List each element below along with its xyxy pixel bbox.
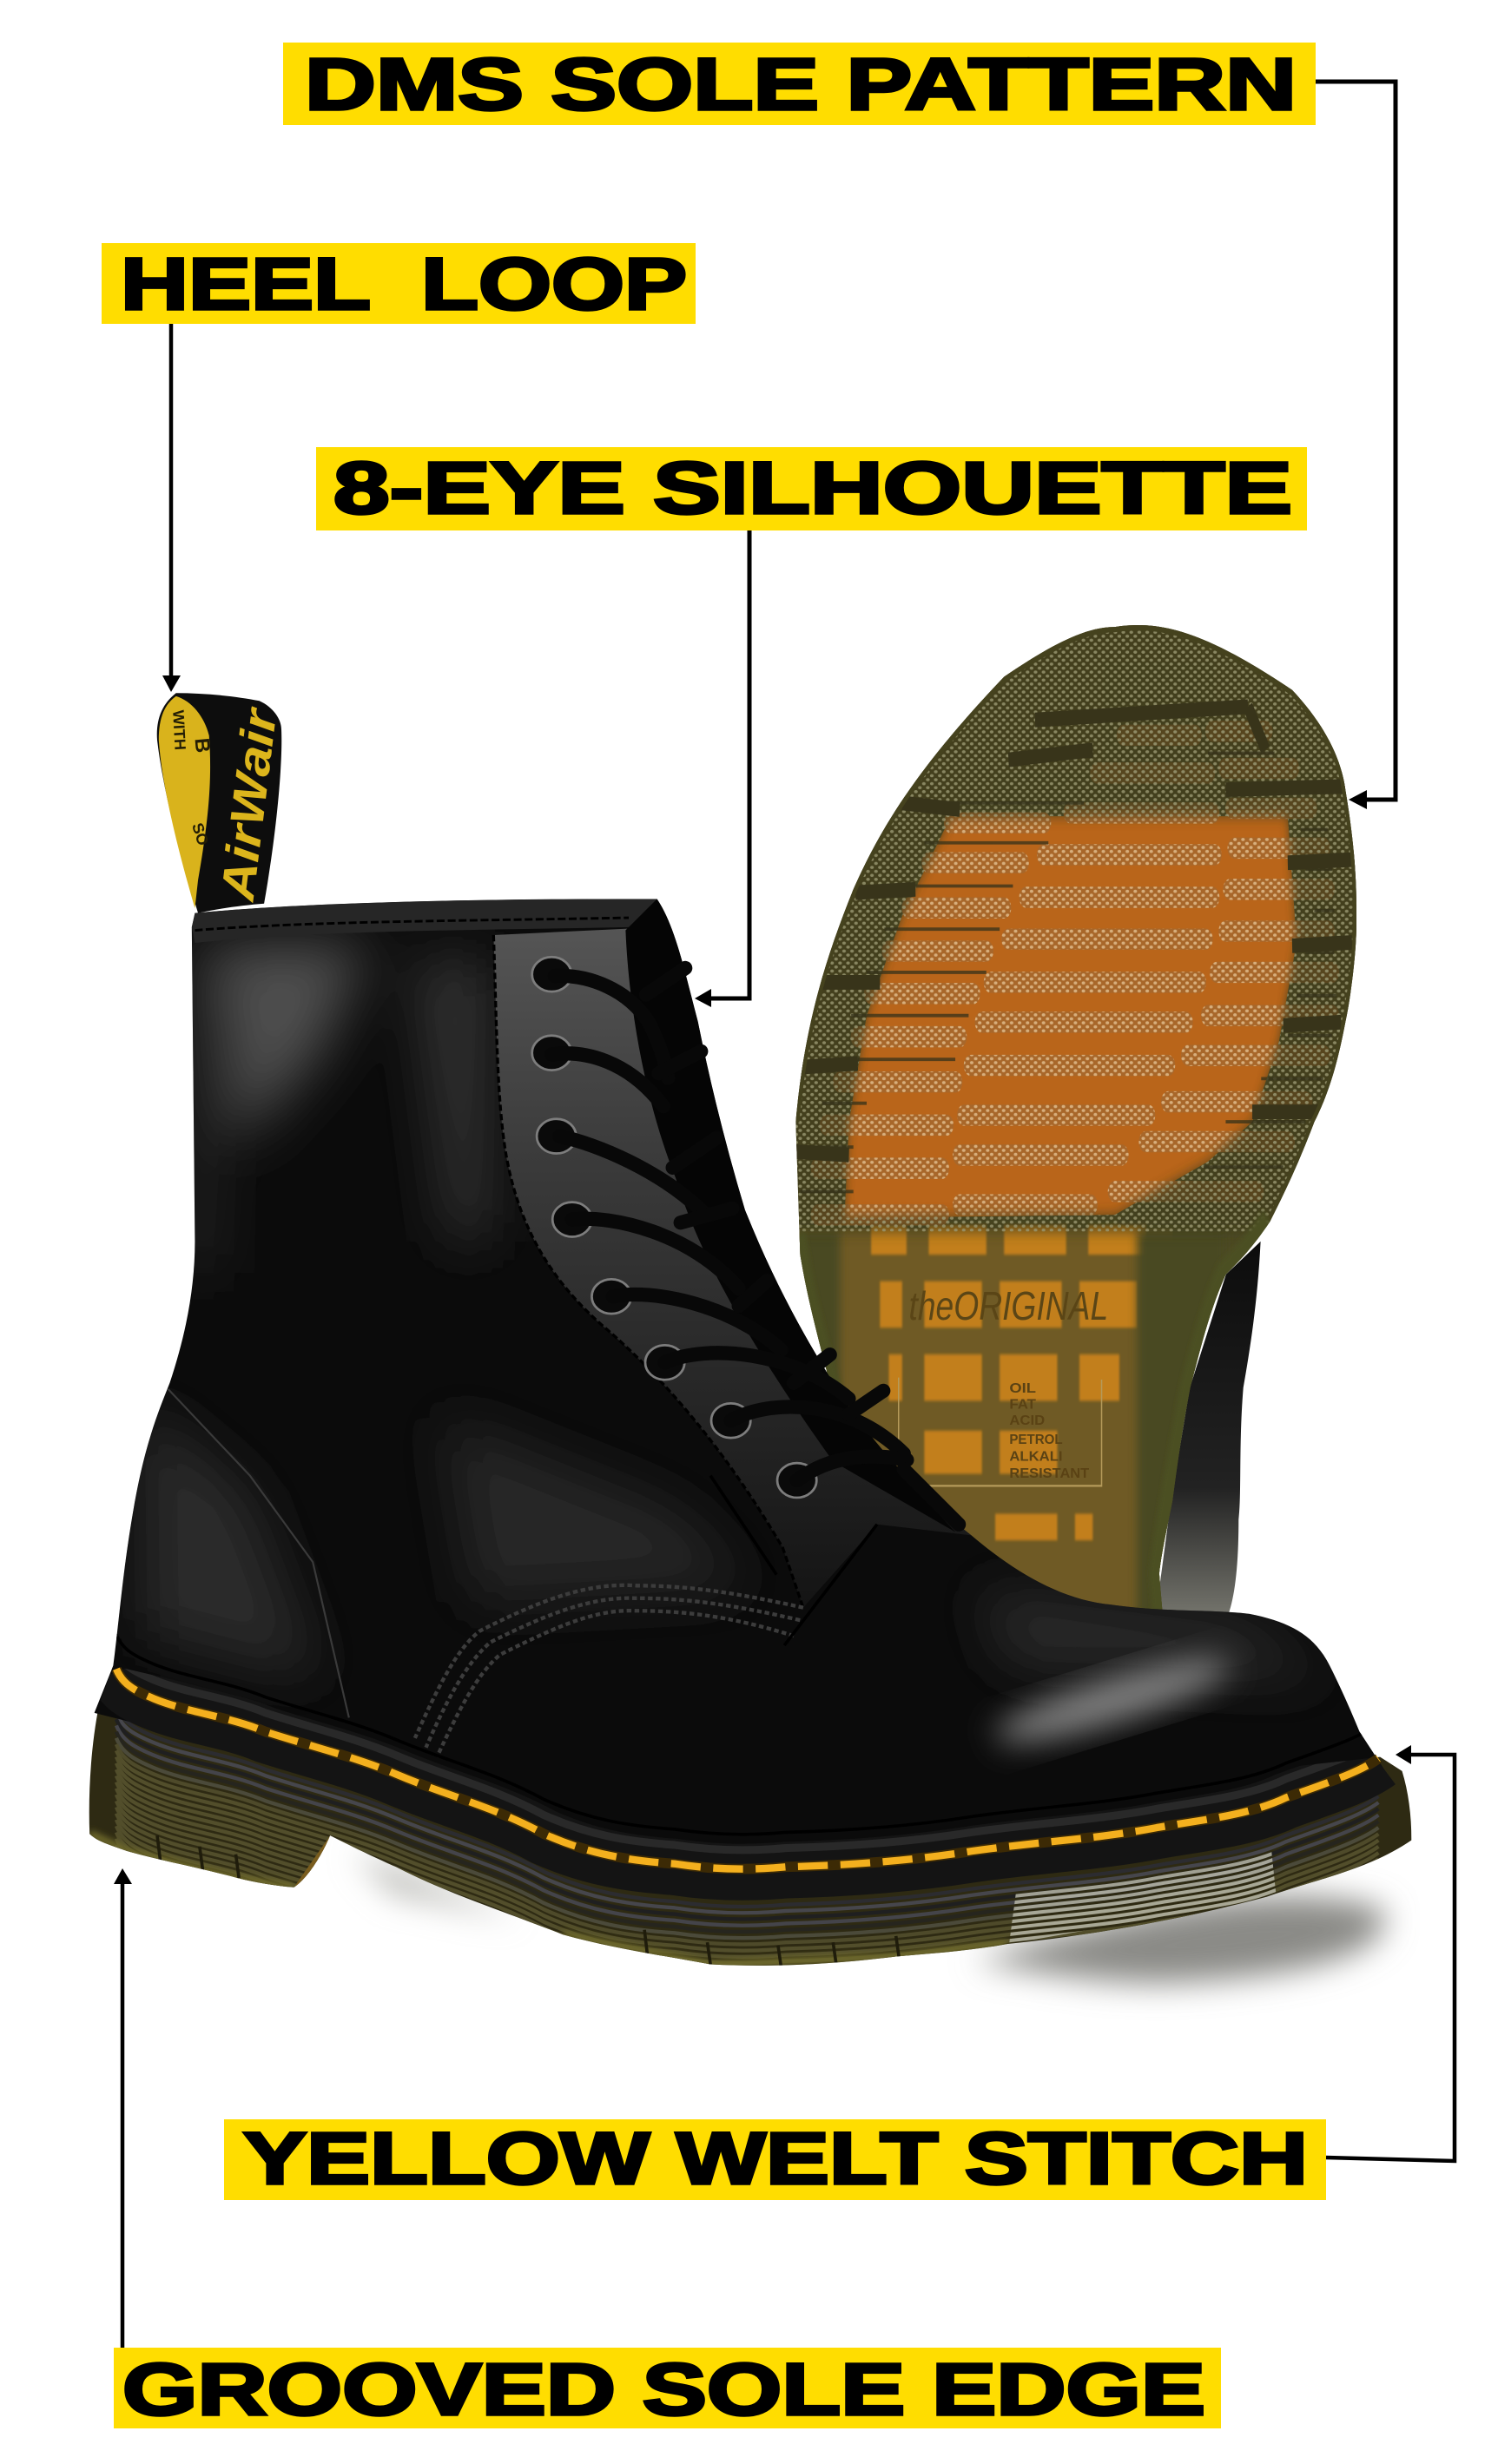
- leather base: [78, 880, 1415, 1917]
- label: DMS sole pattern: DMS SOLE PATTERN: [305, 43, 1297, 125]
- sole base colour: [795, 625, 1356, 1583]
- connector: DMS sole pattern: [1316, 82, 1396, 809]
- moulded resistance panel: ACID: [1009, 1413, 1045, 1427]
- quarter seam: [168, 1389, 349, 1717]
- moulded resistance panel: FAT: [1009, 1396, 1036, 1412]
- label: 8-eye silhouette: 8-EYE SILHOUETTE: [333, 447, 1292, 529]
- grooved sole ribs: [116, 1707, 1378, 2045]
- orange centre glow: [844, 816, 1297, 1218]
- label: 8-eye silhouette: [316, 447, 1307, 530]
- tread grooves: [795, 707, 1356, 1155]
- label: grooved sole edge: GROOVED SOLE EDGE: [122, 2349, 1205, 2430]
- moulded text: the original: theORIGINAL: [908, 1285, 1108, 1329]
- front boot upper leather: [78, 880, 1415, 1917]
- connector: 8-eye silhouette: [695, 530, 749, 1007]
- label: yellow welt stitch: YELLOW WELT STITCH: [243, 2118, 1308, 2199]
- yellow welt stitching: [116, 1669, 1378, 1869]
- tongue opening: [625, 899, 955, 1532]
- leather highlights: [138, 943, 1336, 1682]
- sole rim shading: [795, 1222, 1270, 1627]
- translucent heel area: [795, 1225, 1225, 1640]
- moulded resistance panel: OIL: [1009, 1380, 1036, 1396]
- heel loop: [157, 693, 287, 913]
- toe gloss: [989, 1644, 1237, 1757]
- loop inner words: B: [190, 737, 214, 754]
- loop inner words: [169, 709, 214, 847]
- loop inner words: SO: [188, 820, 212, 847]
- rear boot outsole (DMS sole pattern): [782, 610, 1368, 1640]
- loop inner words: WITH: [169, 709, 188, 750]
- moulded resistance panel: PETROL: [1009, 1432, 1063, 1447]
- tread notches: [157, 1835, 899, 1967]
- connector: yellow welt stitch: [1326, 1745, 1455, 2161]
- facing stitching: [493, 935, 803, 1608]
- label: heel loop: HEEL LOOP: [121, 243, 687, 325]
- moulded resistance panel: ALKALI: [1009, 1448, 1063, 1464]
- collar band: [192, 899, 657, 943]
- stud texture on ring: [782, 610, 1368, 1231]
- loop lettering: AirWair: [210, 704, 287, 906]
- sole rim: [795, 625, 1356, 1222]
- sole toe glare: [116, 1719, 1378, 1982]
- moulded resistance panel: [899, 1378, 1102, 1486]
- lug gaps on ring: [800, 753, 1336, 1191]
- welt top line: [116, 1634, 1378, 1835]
- welt rim: [116, 1650, 1378, 1872]
- throat edge: [710, 1476, 877, 1645]
- sole base: [78, 1650, 1430, 1980]
- laces: [551, 968, 959, 1525]
- olive outer ring of the tread: [782, 610, 1368, 1231]
- sole heel wedge: [294, 1835, 377, 1888]
- lace facing: [493, 927, 972, 1608]
- loop outer band: [157, 693, 281, 913]
- eyelets: [532, 957, 816, 1498]
- illustration: pair of black boots: [78, 610, 1430, 2045]
- loop yellow inner: [159, 696, 210, 908]
- connector: grooved sole edge: [114, 1868, 132, 2349]
- connector: heel loop: [162, 324, 181, 692]
- tread lugs: [818, 731, 1332, 1215]
- rear boot upper: [1155, 1242, 1261, 1620]
- ground shadow: [353, 1851, 1385, 1983]
- triple stitching: [415, 1585, 803, 1757]
- moulded resistance panel: RESISTANT: [1009, 1466, 1089, 1481]
- sole lower edge glow: [89, 1834, 1007, 1964]
- front boot outsole: [78, 1650, 1430, 2045]
